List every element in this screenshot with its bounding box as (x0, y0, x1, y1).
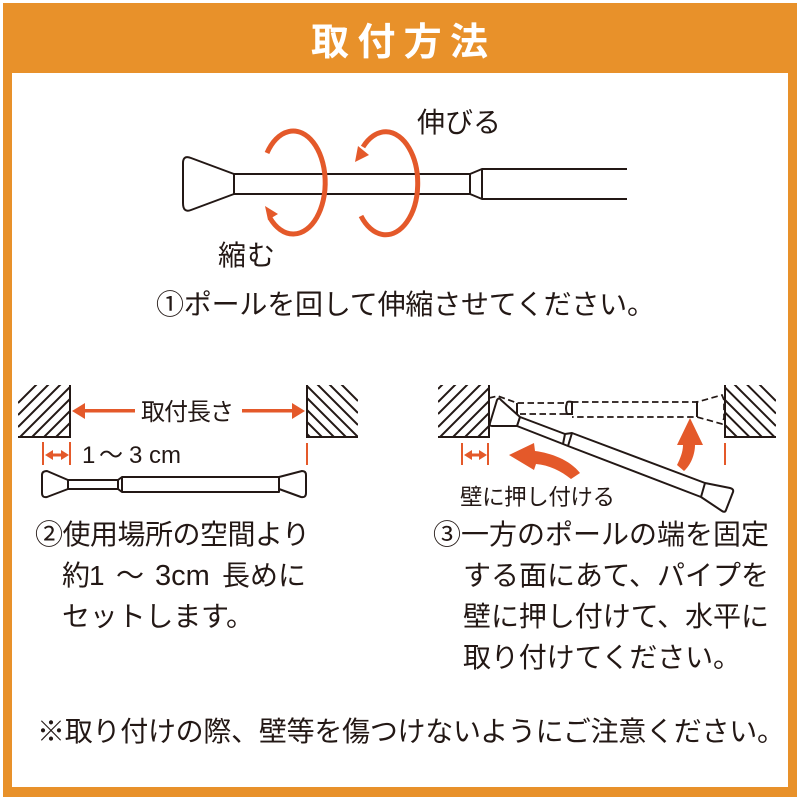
step 2 text: セットします。 (62, 601, 254, 632)
step 1 diagram: rotating pole (183, 107, 627, 271)
label: press against wall: 壁に押し付ける (460, 485, 615, 510)
step 2 text: ～ (116, 560, 144, 591)
step 1 text: ①ポールを回して伸縮させてください。 (156, 289, 655, 320)
pole (183, 157, 627, 211)
curved arrow: lift up (677, 418, 703, 471)
dimension: 1-3 cm (43, 442, 307, 465)
tilted pole (490, 398, 733, 512)
step 2 text: 3cm (155, 560, 210, 592)
step 3 text: ③一方のポールの端を固定 (433, 519, 769, 550)
step 2 text: 1 (89, 560, 105, 591)
arrow: left span (72, 403, 135, 419)
step 2 text: ②使用場所の空間より (35, 519, 310, 550)
step 2 text: 約 (62, 560, 90, 591)
rotation arrow: shrink (265, 131, 325, 234)
caution note: ※取り付けの際、壁等を傷つけないようにご注意ください。 (37, 716, 785, 747)
label: mounting length: 取付長さ (141, 399, 234, 426)
rotation arrow: extend (355, 132, 418, 235)
label: 1-3 cm: 3 (129, 442, 142, 469)
label: 1-3 cm: 1 (82, 442, 95, 469)
dashed pole: horizontal position (489, 395, 724, 424)
title: 取付方法 (311, 22, 488, 64)
label: 1-3 cm: cm (149, 442, 181, 469)
step 3 text (433, 519, 769, 673)
step 2 text (35, 519, 310, 632)
curved arrow: push to wall (509, 443, 580, 479)
wall left (18, 385, 71, 438)
dimension: 1-3 cm (462, 443, 725, 465)
label: shrink: 縮む (218, 240, 275, 271)
step 3 text: 取り付けてください。 (463, 642, 741, 673)
step 3 text: する面にあて、パイプを (463, 560, 769, 591)
step 2 diagram (18, 385, 358, 498)
wall right (724, 385, 776, 438)
step 2 text: 長めに (222, 560, 306, 591)
step 3 diagram (438, 385, 776, 513)
label: extend: 伸びる (417, 107, 501, 138)
wall left (438, 385, 490, 438)
wall right (306, 385, 358, 438)
arrow: right span (242, 403, 305, 419)
pole (42, 471, 306, 497)
label: 1-3 cm: ～ (99, 442, 123, 469)
step 3 text: 壁に押し付けて、水平に (463, 601, 769, 632)
